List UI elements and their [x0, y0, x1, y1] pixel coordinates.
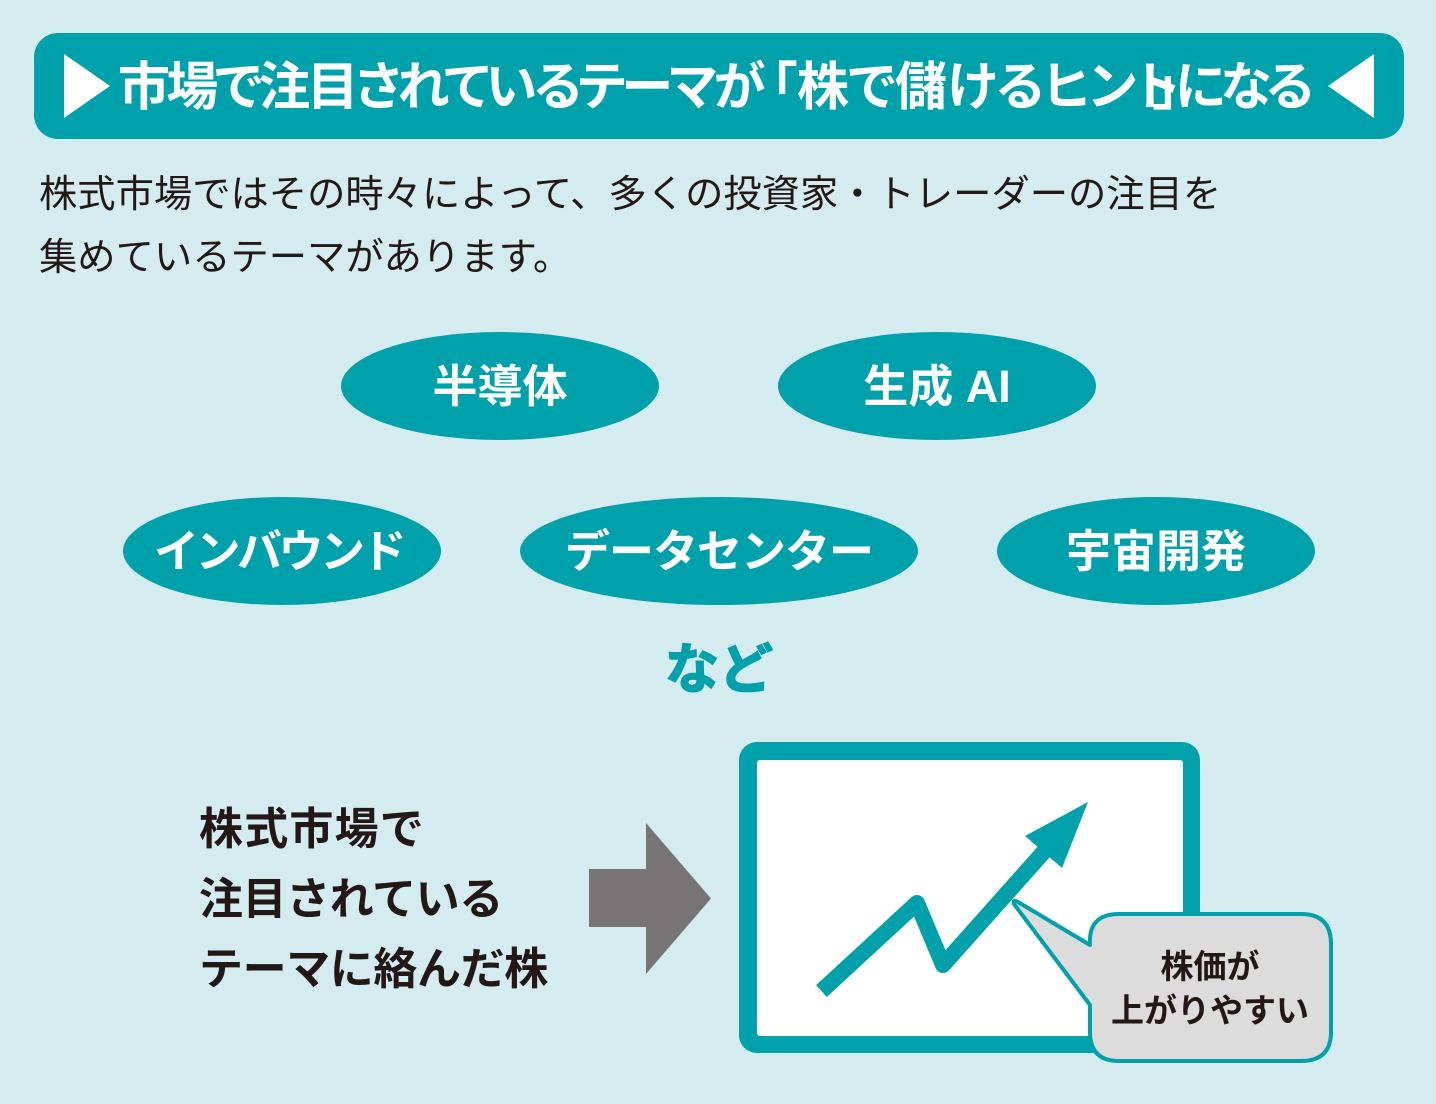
intro text: 株式市場ではその時々によって、多くの投資家・トレーダーの注目を: [39, 173, 1221, 216]
heading text: [118, 59, 1310, 117]
pill: data center: [520, 497, 918, 605]
heading text: 市場で注目されているテーマが: [118, 59, 762, 117]
pill: data center: データセンター: [565, 526, 873, 577]
pill: semiconductors: 半導体: [432, 361, 568, 412]
text: etc: など: [665, 640, 773, 700]
pill: space development: 宇宙開発: [1066, 526, 1246, 577]
arrow: [589, 823, 711, 974]
chart panel: [739, 742, 1333, 1063]
bubble text: 上がりやすい: [1111, 992, 1309, 1029]
pill: inbound: [123, 497, 441, 605]
caption: theme stocks: 注目されている: [199, 875, 503, 924]
caption: theme stocks: テーマに絡んだ株: [199, 945, 548, 994]
icon: left triangle: [64, 54, 110, 118]
heading text: 「: [771, 59, 797, 117]
speech bubble: [1014, 901, 1331, 1061]
rising line arrow: [822, 802, 1088, 991]
pill: generative AI: 生成 AI: [863, 361, 1011, 412]
caption: theme stocks: 株式市場で: [199, 805, 425, 854]
title banner: [34, 33, 1404, 139]
bubble text: 株価が: [1160, 948, 1260, 985]
caption: theme stocks: [199, 805, 548, 994]
heading text: 株で儲けるヒント: [797, 59, 1179, 117]
intro text: [39, 173, 1221, 279]
pill: generative AI: [778, 332, 1096, 440]
pill: semiconductors: [341, 332, 659, 440]
heading text: になる: [1175, 59, 1309, 117]
bubble text: [1111, 948, 1309, 1029]
pill: inbound: インバウンド: [154, 526, 403, 577]
pill: space development: [997, 497, 1315, 605]
intro text: 集めているテーマがあります。: [39, 236, 571, 279]
heading text: 」: [1153, 59, 1179, 117]
icon: right triangle: [1328, 54, 1374, 118]
monitor frame: [739, 742, 1200, 1053]
